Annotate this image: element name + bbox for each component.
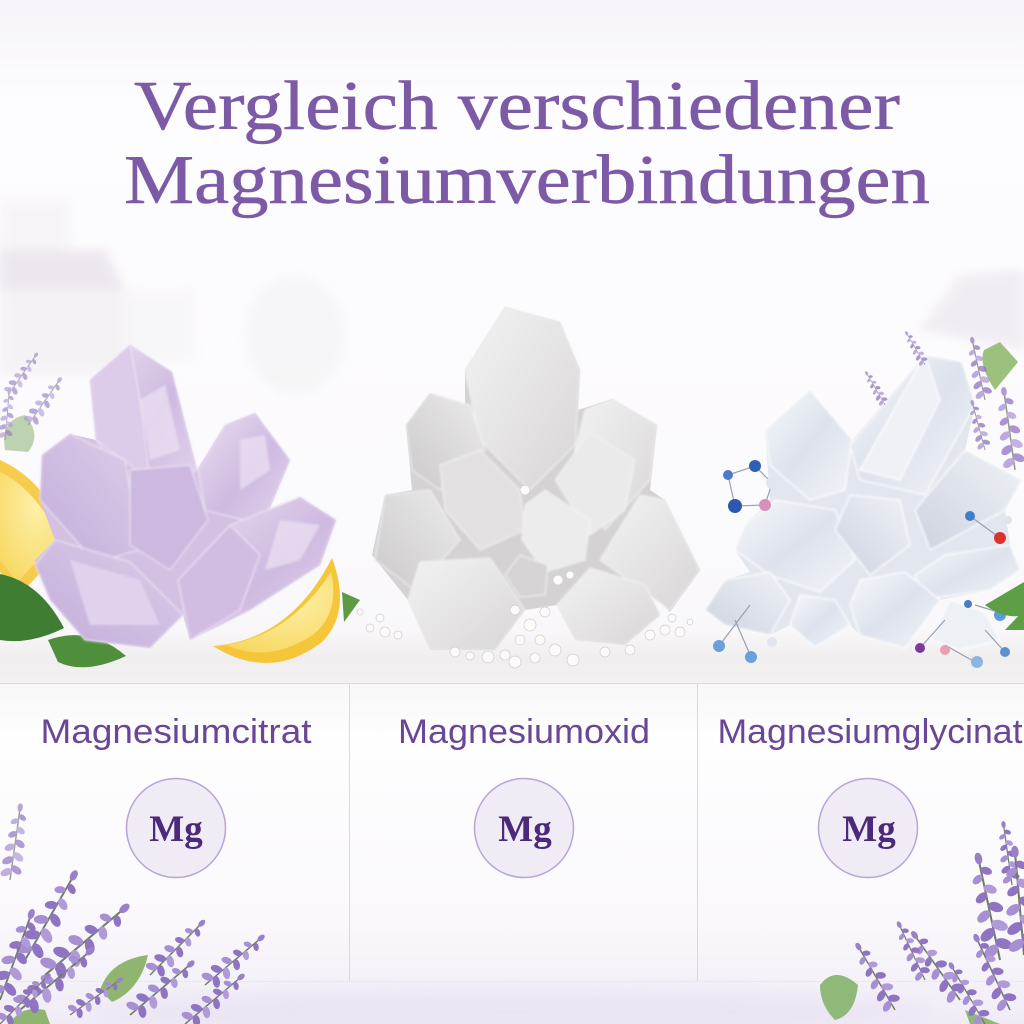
panel: Magnesiumglycinat — [718, 713, 1023, 878]
background: blurred village — [0, 200, 1024, 395]
title: Vergleich verschiedener — [134, 68, 900, 145]
illustration: lemon and leaves — [0, 415, 360, 667]
panel: Magnesiumoxid — [398, 713, 650, 878]
crystal: Magnesiumoxid — [372, 307, 700, 650]
crystal: Magnesiumglycinat — [705, 355, 1022, 650]
crystal: Magnesiumcitrat — [35, 345, 336, 648]
badge: Mg: Mg — [149, 809, 203, 850]
label: Magnesiumcitrat: Magnesiumcitrat — [40, 713, 312, 751]
lavender: lower left — [0, 802, 272, 1024]
title — [124, 68, 930, 219]
lavender: lower right — [820, 820, 1024, 1024]
badge: Mg: Mg — [842, 809, 896, 850]
panel: Magnesiumcitrat — [40, 713, 312, 878]
white powder — [357, 485, 693, 668]
lavender and leaves: upper right — [861, 329, 1024, 630]
lavender: upper left — [0, 348, 69, 441]
label: Magnesiumoxid: Magnesiumoxid — [398, 713, 650, 751]
badge: Mg — [474, 778, 574, 878]
panel dividers — [0, 683, 1024, 982]
molecule balls — [713, 460, 1012, 668]
label: Magnesiumglycinat: Magnesiumglycinat — [718, 713, 1023, 751]
badge: Mg: Mg — [498, 809, 552, 850]
badge: Mg — [126, 778, 226, 878]
title: Magnesiumverbindungen — [124, 142, 930, 219]
badge: Mg — [818, 778, 918, 878]
